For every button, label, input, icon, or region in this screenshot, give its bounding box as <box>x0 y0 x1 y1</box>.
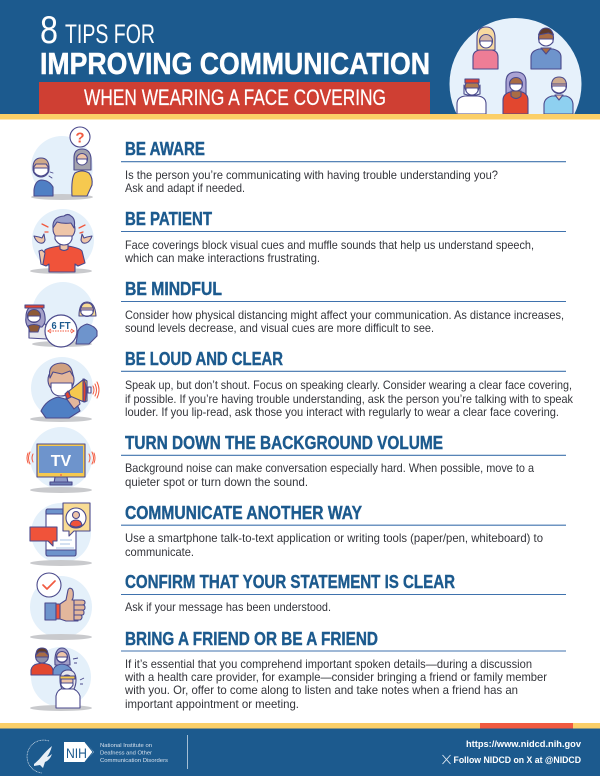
body text: Consider how physical distancing might affect your communication. As distance increases, <box>125 309 564 322</box>
institute name: Deafness and Other <box>100 750 152 756</box>
body text: with a health care provider, for example—consider bringing a friend or family member <box>124 671 547 684</box>
heading: BE LOUD AND CLEAR <box>125 349 283 369</box>
institute name <box>100 743 168 764</box>
checkmark badge <box>37 573 61 597</box>
heading: BE AWARE <box>125 139 205 159</box>
title: 8 <box>40 9 58 52</box>
contact links: Follow NIDCD on X at @NIDCD <box>454 755 581 765</box>
icon: thumbs up <box>30 573 92 640</box>
body text: Background noise can make conversation especially hard. When possible, move to a <box>125 462 535 475</box>
body text: with you. Or, offer to come along to listen and take notes when a friend has an <box>124 684 518 697</box>
icon: smartphone with messages <box>30 503 92 566</box>
icon: group of people wearing masks <box>450 18 582 114</box>
contact links <box>454 739 581 765</box>
body text <box>125 379 573 419</box>
body text: communicate. <box>125 546 194 559</box>
body text: quieter spot or turn down the sound. <box>125 476 308 489</box>
panel: communicate another way <box>121 503 566 559</box>
panel: be patient <box>121 209 566 265</box>
contact links: https://www.nidcd.nih.gov <box>466 739 581 749</box>
body text: louder. If you lip-read, ask those you interact with regularly to wear a clear face covering. <box>125 406 559 419</box>
body text: if possible. If you’re having trouble understanding, ask the person you’re talking with to speak <box>125 393 573 406</box>
footer <box>0 723 600 776</box>
logo: NIH <box>64 742 94 762</box>
body text <box>125 309 564 335</box>
icon: television <box>27 427 95 493</box>
question bubble <box>70 127 90 147</box>
body text: which can make interactions frustrating. <box>124 252 320 265</box>
body text <box>125 532 543 559</box>
body text: sound levels decrease, and visual cues are more difficult to see. <box>125 322 434 335</box>
title: TIPS FOR <box>65 19 155 49</box>
body text <box>124 239 534 265</box>
body text: Ask if your message has been understood. <box>125 601 331 614</box>
logo: NIH: NIH <box>66 745 87 761</box>
icon: television: TV <box>51 453 72 470</box>
title: IMPROVING COMMUNICATION <box>40 46 430 81</box>
icon: two people, one confused: ? <box>75 130 85 146</box>
panel: confirm that your statement is clear <box>121 572 566 614</box>
panel: be loud and clear <box>121 349 573 419</box>
heading: BE MINDFUL <box>125 279 222 299</box>
heading: TURN DOWN THE BACKGROUND VOLUME <box>125 433 443 453</box>
icon: man with megaphone <box>30 357 99 422</box>
icon: two people six feet apart <box>25 282 97 347</box>
icon: friends and doctor <box>30 647 92 711</box>
subtitle banner: WHEN WEARING A FACE COVERING <box>84 85 386 110</box>
subtitle banner <box>39 82 430 114</box>
panel: bring a friend or be a friend <box>121 629 566 711</box>
heading: BRING A FRIEND OR BE A FRIEND <box>125 629 378 649</box>
body text: If it’s essential that you comprehend important spoken details—during a discussion <box>125 658 532 671</box>
body text: Is the person you’re communicating with having trouble understanding you? <box>125 169 499 182</box>
heading: BE PATIENT <box>125 209 212 229</box>
title <box>40 9 430 81</box>
icon: X logo <box>442 755 450 764</box>
logo: HHS eagle <box>27 740 52 773</box>
icon: two people, one confused <box>31 127 93 200</box>
icon: frustrated man <box>30 209 94 274</box>
body text <box>124 658 547 711</box>
heading: CONFIRM THAT YOUR STATEMENT IS CLEAR <box>125 572 455 592</box>
header banner <box>0 0 600 120</box>
heading: COMMUNICATE ANOTHER WAY <box>125 503 362 523</box>
body text: Face coverings block visual cues and muffle sounds that help us understand speech, <box>125 239 534 252</box>
distance badge <box>45 315 77 347</box>
body text: important appointment or meeting. <box>125 698 299 711</box>
body text: Use a smartphone talk-to-text application or writing tools (paper/pen, whiteboard) to <box>125 532 543 545</box>
body text: Speak up, but don’t shout. Focus on speaking clearly. Consider wearing a clear face covering, <box>125 379 572 392</box>
body text <box>125 169 499 195</box>
body text <box>125 462 535 489</box>
panel: be mindful <box>121 279 566 335</box>
institute name: National Institute on <box>100 743 152 749</box>
panel: turn down the background volume <box>121 433 566 489</box>
body text: Ask and adapt if needed. <box>125 182 245 195</box>
icon: two people six feet apart: 6 FT <box>52 321 70 332</box>
institute name: Communication Disorders <box>100 758 168 764</box>
panel: be aware <box>121 139 566 195</box>
